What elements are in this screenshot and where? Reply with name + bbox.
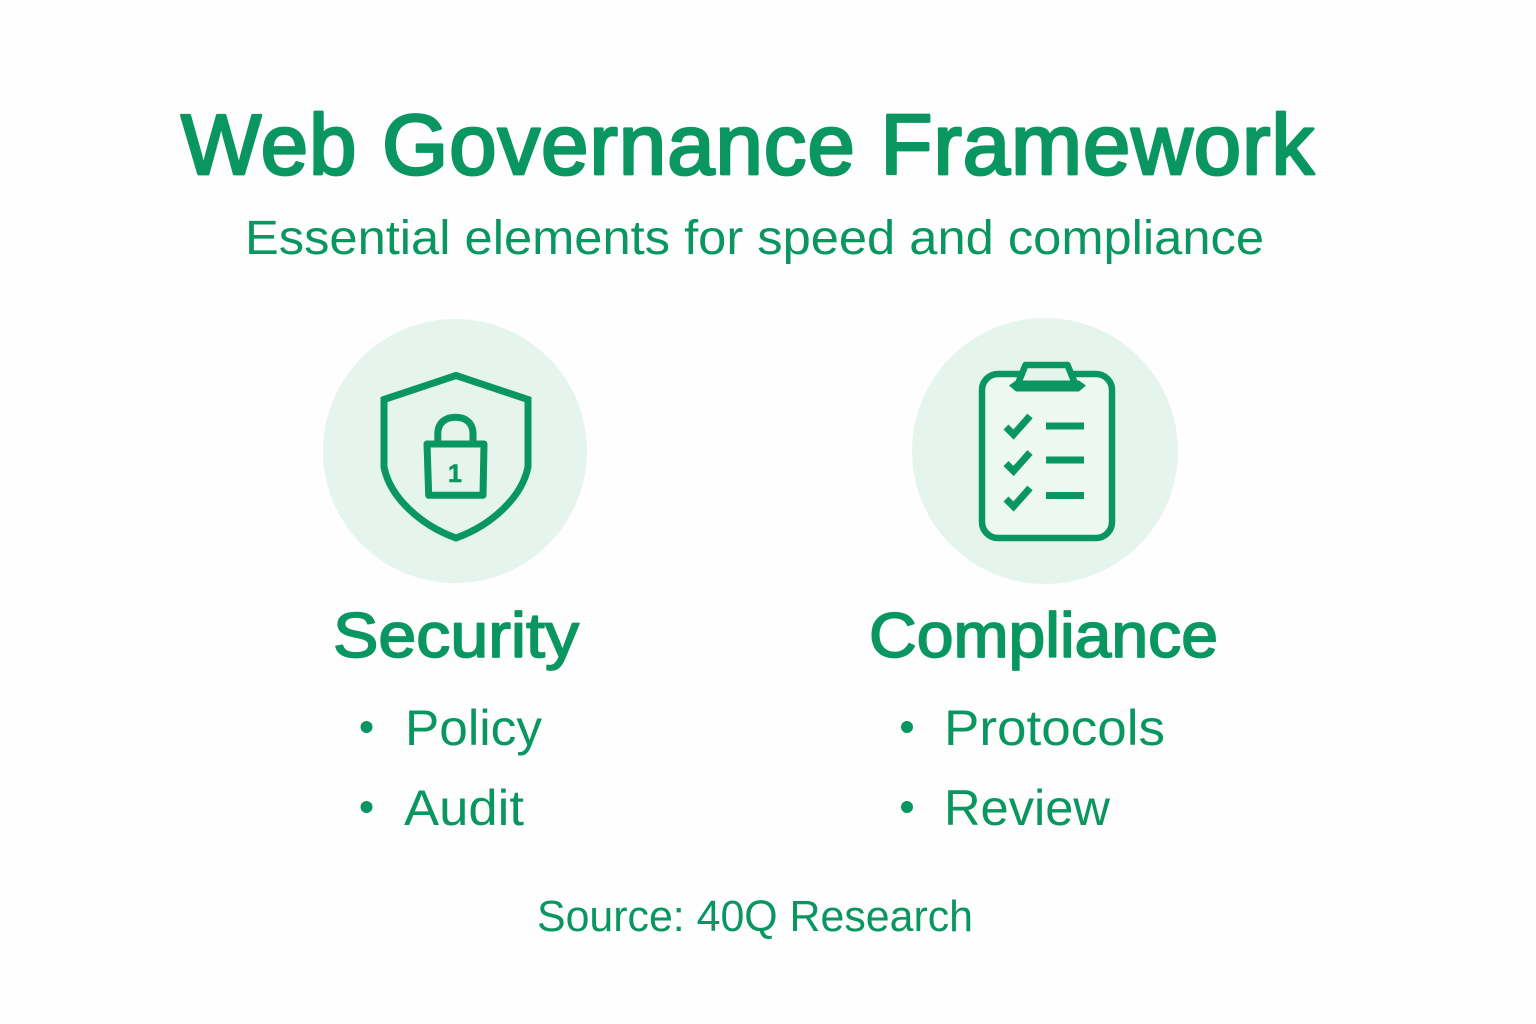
panel: compliance [869,318,1218,836]
subtitle: Essential elements for speed and compliance [245,212,1264,265]
checklist row 3 [1006,488,1084,506]
padlock shackle [438,417,473,442]
padlock number: 1 [448,460,462,488]
checklist row 1 [1006,416,1084,434]
heading: security: Security [333,601,580,671]
item: review: Review [944,780,1111,836]
shield outline [384,376,528,538]
clipboard board [982,374,1112,538]
bullet: review [901,801,913,813]
icon: shield with padlock [323,319,587,583]
list: compliance items [901,700,1165,836]
bullet: audit [360,801,372,813]
icon background circle [323,319,587,583]
bullet: protocols [901,721,913,733]
item: policy: Policy [405,700,542,756]
panel: security [323,319,587,836]
icon: clipboard checklist [912,318,1178,584]
clipboard clip [1009,365,1086,392]
heading: compliance: Compliance [869,601,1218,671]
padlock body [427,444,484,495]
checklist row 2 [1006,452,1084,471]
icon background circle [912,318,1178,584]
item: audit: Audit [404,780,524,836]
list: security items [360,700,542,836]
title: Web Governance Framework [181,98,1314,193]
bullet: policy [360,721,372,733]
item: protocols: Protocols [944,700,1165,756]
source note: Source: 40Q Research [537,892,973,941]
